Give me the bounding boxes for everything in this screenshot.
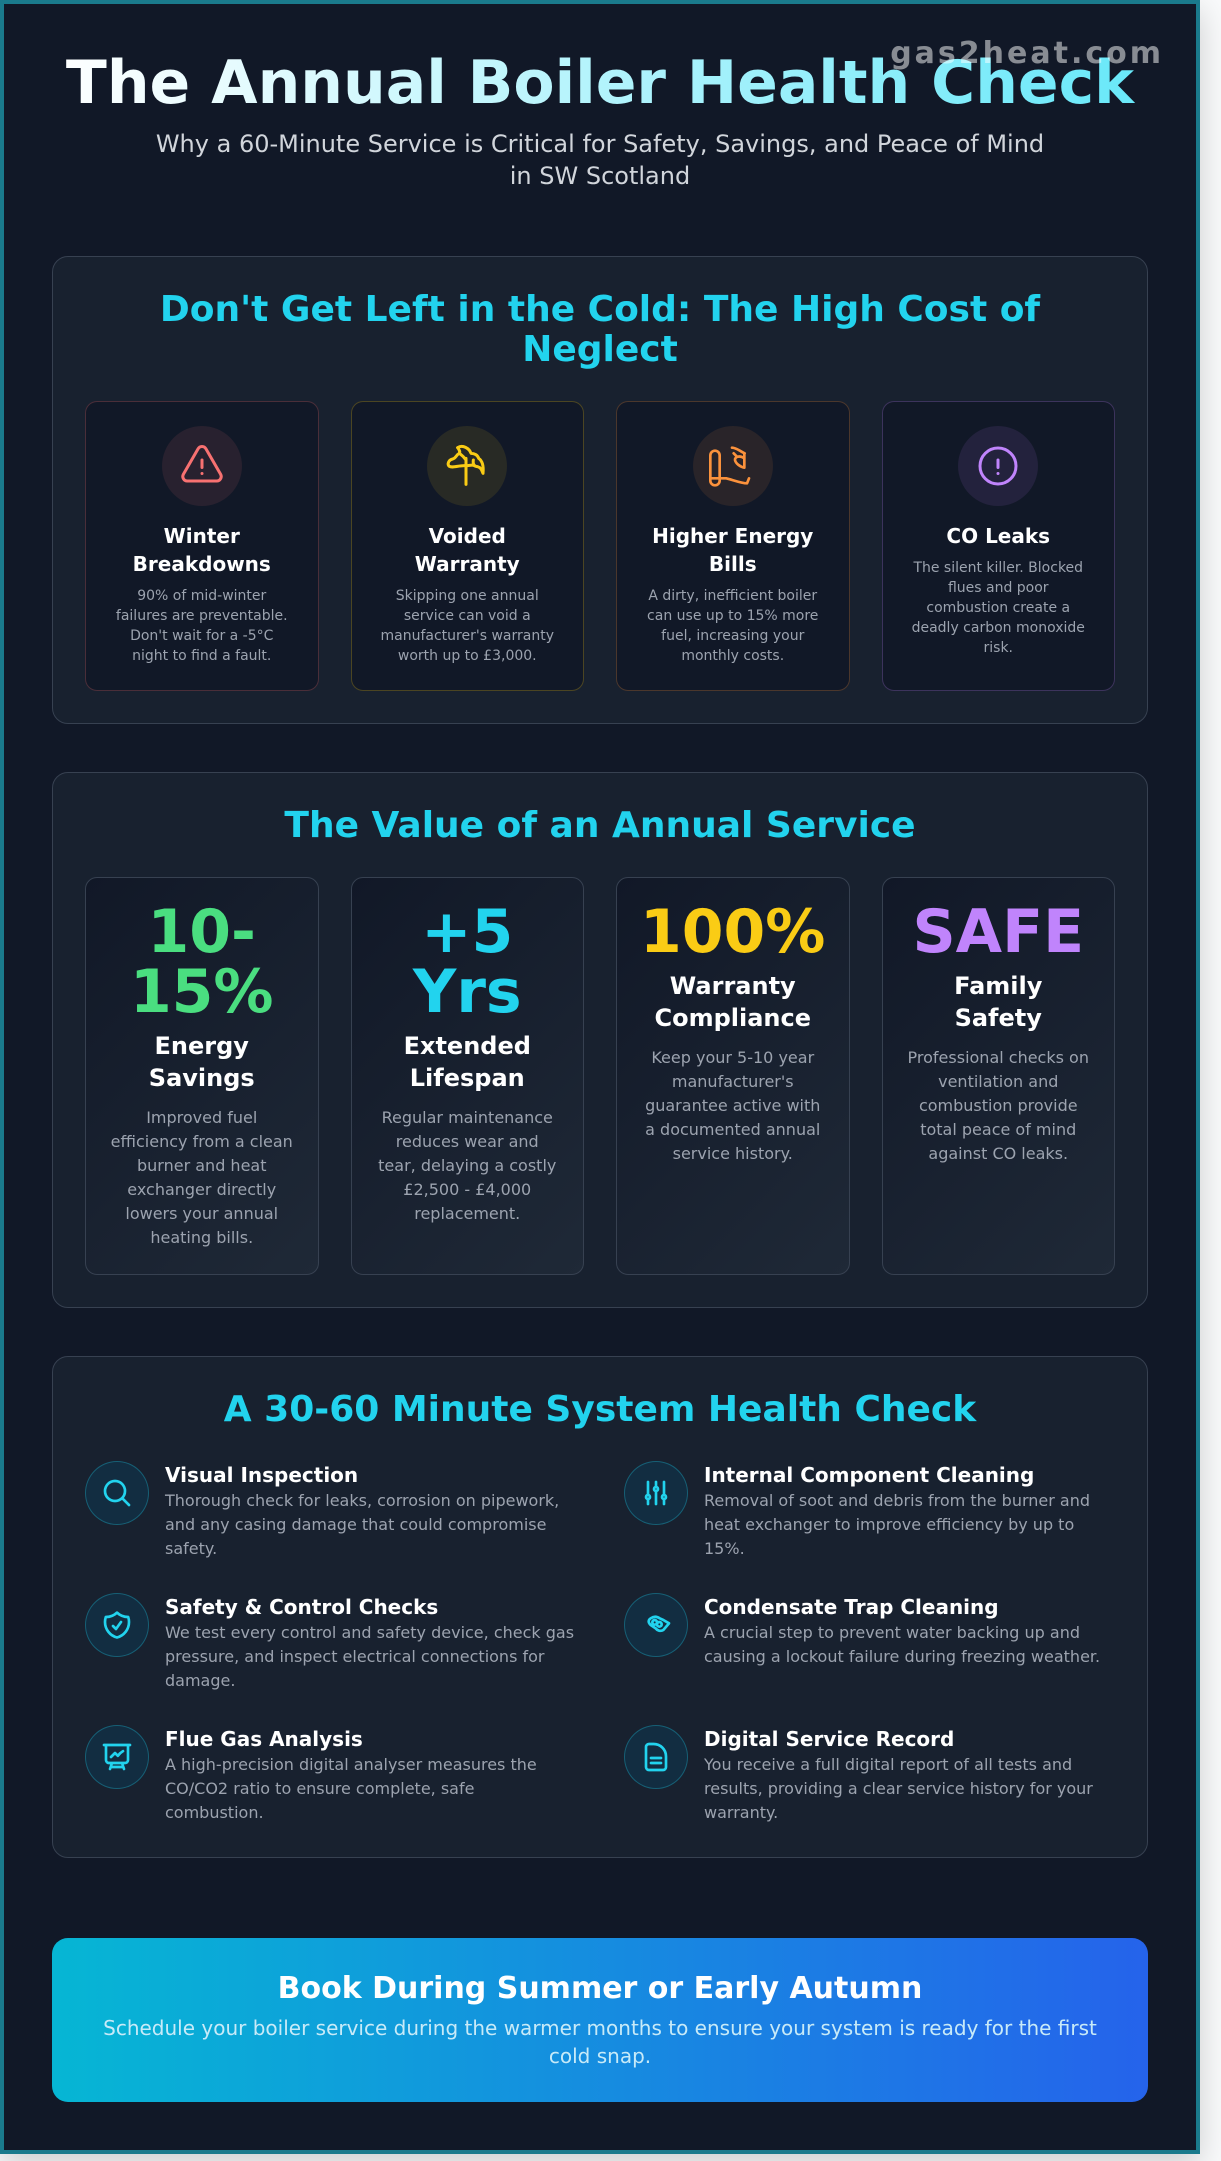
subtitle: Why a 60-Minute Service is Critical for Safety, Savings, and Peace of Mind in SW Scotland [156, 130, 1044, 190]
icon: document [624, 1725, 688, 1789]
panel: high cost of neglect [52, 256, 1148, 724]
icon: exclamation circle [958, 426, 1038, 506]
check text: A crucial step to prevent water backing up and causing a lockout failure during freezing weather. [704, 1623, 1100, 1666]
title: The Annual Boiler Health Check [66, 48, 1134, 118]
check text: Internal Component Cleaning [704, 1463, 1034, 1487]
card title: CO Leaks [946, 524, 1050, 548]
icon: warning triangle [162, 426, 242, 506]
stat number: SAFE [912, 897, 1084, 967]
heading: value of annual service: The Value of an Annual Service [284, 805, 916, 846]
card title: Voided Warranty [415, 524, 520, 576]
stat text: Improved fuel efficiency from a clean burner and heat exchanger directly lowers your annual heating bills. [111, 1108, 293, 1247]
stat card: energy savings [85, 877, 318, 1275]
stat card: warranty compliance [616, 877, 850, 1275]
panel: system health check [52, 1356, 1148, 1858]
card text: A dirty, inefficient boiler can use up to 15% more fuel, increasing your monthly costs. [647, 588, 818, 664]
check text: Condensate Trap Cleaning [704, 1595, 999, 1619]
check: flue gas analysis [85, 1725, 537, 1822]
stat title: Extended Lifespan [404, 1032, 531, 1092]
check text: We test every control and safety device, check gas pressure, and inspect electrical connections for damage. [165, 1623, 574, 1690]
heading: system health check: A 30-60 Minute System Health Check [224, 1389, 976, 1430]
card title: Winter Breakdowns [133, 524, 271, 576]
check text: Visual Inspection [165, 1463, 358, 1487]
stat text: Keep your 5-10 year manufacturer's guarantee active with a documented annual service history. [645, 1048, 820, 1163]
icon: warranty scribble [427, 426, 507, 506]
icon: magnifying glass [85, 1461, 149, 1525]
icon: fuel cylinder [693, 426, 773, 506]
stat title: Warranty Compliance [654, 972, 811, 1032]
stat title: Family Safety [954, 972, 1042, 1032]
check text: A high-precision digital analyser measures the CO/CO2 ratio to ensure complete, safe combustion. [165, 1755, 537, 1822]
check text: You receive a full digital report of all tests and results, providing a clear service history for your warranty. [704, 1755, 1093, 1822]
icon: sliders [624, 1461, 688, 1525]
card title: Higher Energy Bills [652, 524, 813, 576]
stat card: extended lifespan [350, 877, 584, 1275]
card text: 90% of mid-winter failures are preventable. Don't wait for a -5°C night to find a fault. [116, 588, 288, 664]
icon: condensate trap [624, 1593, 688, 1657]
cta text: Schedule your boiler service during the warmer months to ensure your system is ready for the first cold snap. [103, 2016, 1097, 2068]
icon: shield check [85, 1593, 149, 1657]
stat number: +5 Yrs [413, 897, 522, 1027]
check text: Removal of soot and debris from the burner and heat exchanger to improve efficiency by up to 15%. [704, 1491, 1090, 1558]
check: safety and control [85, 1593, 574, 1690]
check: digital service record [624, 1725, 1093, 1822]
stat number: 100% [640, 897, 825, 967]
card: winter breakdowns [85, 401, 318, 691]
icon: presentation chart [85, 1725, 149, 1789]
check text: Flue Gas Analysis [165, 1727, 363, 1751]
watermark: gas2heat.com [890, 36, 1164, 71]
stat card: family safety [882, 877, 1115, 1275]
call to action banner [52, 1938, 1148, 2102]
risk cards row [85, 401, 1115, 691]
check text: Safety & Control Checks [165, 1595, 438, 1619]
check text: Thorough check for leaks, corrosion on pipework, and any casing damage that could compromise safety. [165, 1491, 559, 1558]
card: co leaks [882, 401, 1115, 691]
check: visual inspection [85, 1461, 559, 1558]
panel: value of annual service [52, 772, 1148, 1308]
check text [704, 1595, 1100, 1666]
cta heading: Book During Summer or Early Autumn [278, 1971, 922, 2006]
check: internal component cleaning [624, 1461, 1090, 1558]
card: voided warranty [350, 401, 584, 691]
card text: The silent killer. Blocked flues and poor combustion create a deadly carbon monoxide risk. [912, 560, 1085, 656]
check text: Digital Service Record [704, 1727, 954, 1751]
stat number: 10-15% [130, 897, 274, 1027]
value cards row [85, 877, 1115, 1275]
card text: Skipping one annual service can void a manufacturer's warranty worth up to £3,000. [381, 588, 554, 664]
stat text: Professional checks on ventilation and combustion provide total peace of mind against CO leaks. [908, 1048, 1089, 1163]
card: higher energy bills [616, 401, 850, 691]
stat title: Energy Savings [149, 1032, 255, 1092]
stat text: Regular maintenance reduces wear and tear, delaying a costly £2,500 - £4,000 replacement. [378, 1108, 556, 1223]
checklist grid [85, 1461, 1100, 1822]
check: condensate trap [624, 1593, 1100, 1666]
header [66, 48, 1136, 190]
heading: high cost of neglect: Don't Get Left in the Cold: The High Cost of Neglect [160, 289, 1040, 370]
